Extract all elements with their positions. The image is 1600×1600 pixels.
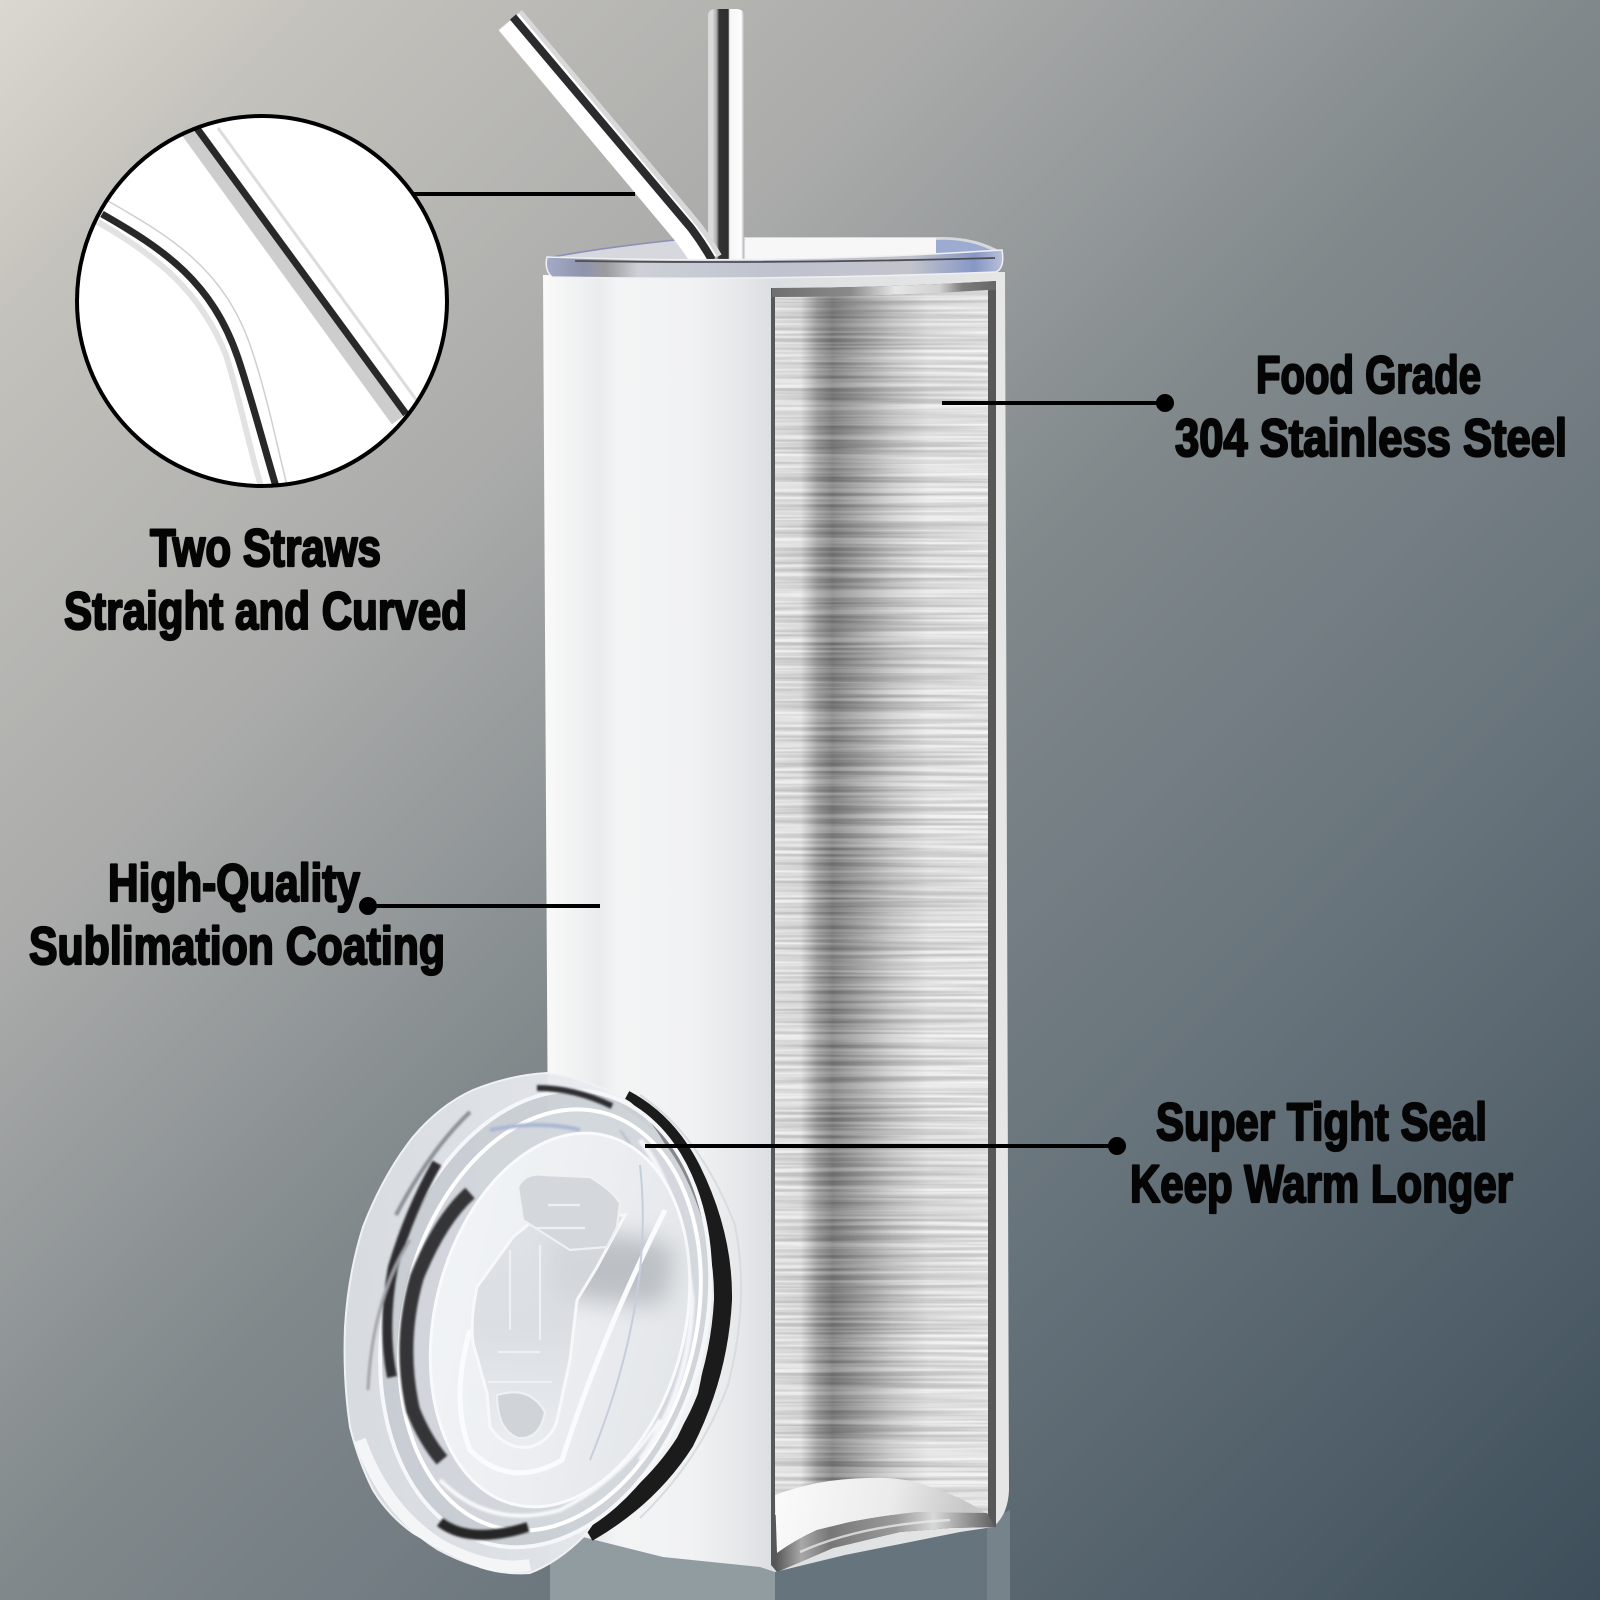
white sublimation coating [543, 272, 1009, 1572]
black silicone seal ring [588, 1099, 723, 1533]
lid back edge [547, 237, 1002, 268]
callout: two straws magnified circle [77, 116, 447, 490]
label: tight seal: Keep Warm Longer [1130, 1155, 1513, 1214]
straight straw [708, 9, 744, 264]
label: sublimation coating: Sublimation Coating [29, 917, 445, 976]
connector: tight seal [645, 1137, 1126, 1155]
tumbler body [543, 250, 1009, 1572]
label: stainless steel: Food Grade [1256, 346, 1481, 405]
straws on tumbler [509, 9, 744, 264]
brushed stainless steel panel [775, 288, 988, 1518]
label: two straws [64, 519, 467, 641]
slider details [488, 1174, 620, 1438]
connector: sublimation coating [359, 897, 600, 915]
label: tight seal [1130, 1093, 1513, 1214]
tumbler reflection [550, 1510, 1010, 1600]
lid rim [546, 250, 1003, 278]
silver frame [771, 281, 996, 1572]
grey band seen through lid [550, 1234, 673, 1305]
label: tight seal: Super Tight Seal [1156, 1093, 1487, 1152]
dark ring reflections [368, 1088, 692, 1535]
lid outer shell [345, 1073, 708, 1573]
connector: straw circle to straw [413, 192, 635, 196]
silver lip [772, 1512, 995, 1572]
label: two straws: Straight and Curved [64, 582, 467, 641]
lid inner window [393, 1105, 727, 1535]
curved straw [509, 17, 712, 262]
lid bottom lip highlight [360, 1440, 530, 1566]
label: sublimation coating: High-Quality [108, 854, 360, 913]
seal translucent halo [640, 1095, 741, 1518]
lid middle ring [334, 1055, 757, 1583]
inner curved band [460, 1210, 665, 1473]
steel floor [775, 1478, 988, 1553]
lid with seal [334, 1055, 757, 1583]
label: stainless steel [1175, 346, 1567, 468]
slider opening [472, 1215, 625, 1447]
connector: stainless steel [942, 394, 1174, 412]
label: sublimation coating [29, 854, 445, 976]
label: two straws: Two Straws [150, 519, 381, 578]
